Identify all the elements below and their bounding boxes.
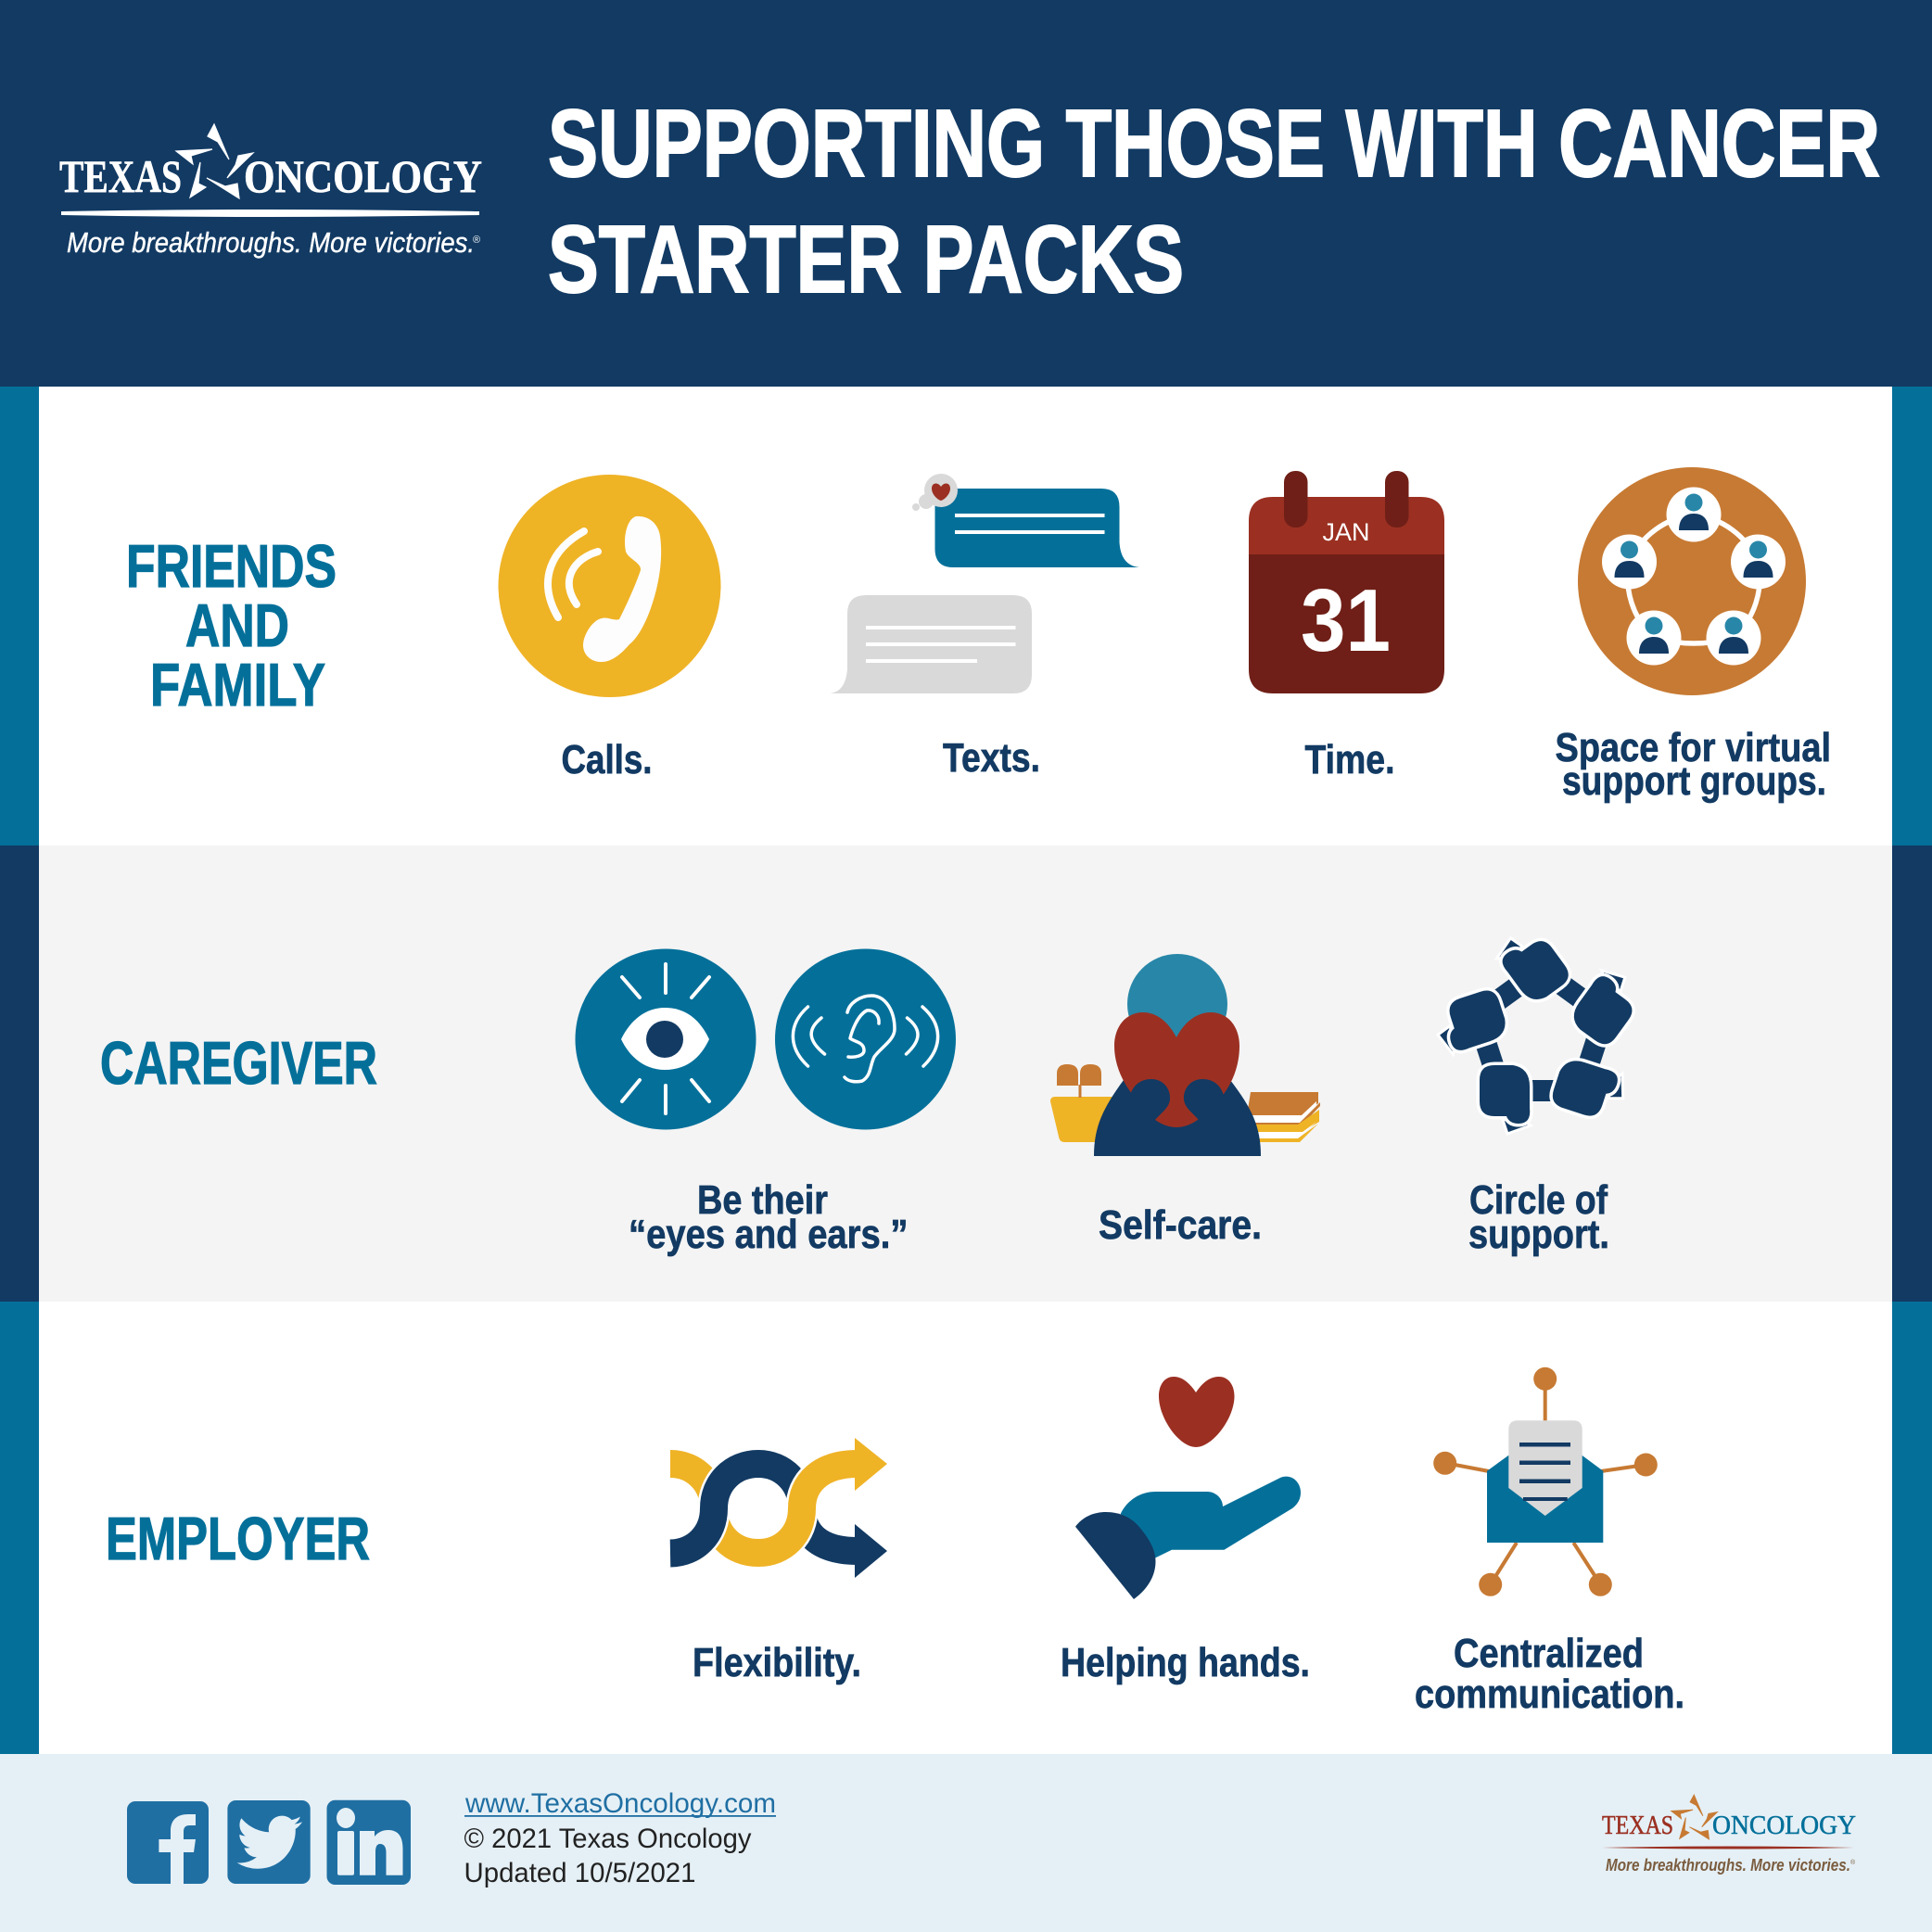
icon: flexibility crossing arrows bbox=[670, 1438, 887, 1578]
panel: caregiver bbox=[0, 845, 1932, 1302]
icon: calendar: 31 bbox=[1301, 571, 1391, 670]
icon: ear bbox=[775, 949, 956, 1129]
logo: Texas Oncology colour: More breakthroughs. More victories. bbox=[1606, 1856, 1850, 1875]
copyright text: Updated 10/5/2021 bbox=[464, 1858, 695, 1888]
icon: eye bbox=[575, 949, 756, 1129]
panel: employer bbox=[0, 1302, 1932, 1754]
icon: linkedin bbox=[326, 1800, 411, 1885]
panel: friends and family bbox=[0, 387, 1932, 845]
icon: facebook bbox=[127, 1801, 209, 1884]
logo: Texas Oncology white: More breakthroughs. More victories. bbox=[67, 226, 475, 259]
label: space for virtual support groups: Space for virtual bbox=[1556, 725, 1831, 770]
label: circle of support: support. bbox=[1468, 1212, 1609, 1257]
icon: calendar: JAN bbox=[1322, 518, 1370, 546]
icon: phone calls bbox=[499, 475, 721, 697]
logo: Texas Oncology colour: TEXAS bbox=[1602, 1811, 1673, 1840]
icon: circle of support fists bbox=[1436, 930, 1642, 1134]
icon: self-care bbox=[1050, 954, 1320, 1156]
label: be their eyes and ears: Be their bbox=[697, 1177, 828, 1223]
heading: employer: EMPLOYER bbox=[106, 1505, 370, 1572]
label: flexibility: Flexibility. bbox=[693, 1640, 861, 1685]
heading: friends and family: FAMILY bbox=[150, 651, 325, 718]
label: centralized communication bbox=[1415, 1631, 1684, 1717]
label: space for virtual support groups: support groups. bbox=[1562, 758, 1826, 804]
title bbox=[548, 90, 1880, 312]
label: calls: Calls. bbox=[562, 737, 653, 782]
icon: text message bubbles bbox=[831, 474, 1139, 693]
label: space for virtual support groups bbox=[1556, 725, 1831, 804]
logo: Texas Oncology white: TEXAS bbox=[59, 150, 182, 202]
label: circle of support: Circle of bbox=[1469, 1177, 1608, 1223]
title: STARTER PACKS bbox=[548, 206, 1184, 312]
label: centralized communication: Centralized bbox=[1454, 1631, 1644, 1676]
label: be their eyes and ears bbox=[629, 1177, 909, 1257]
label: texts: Texts. bbox=[943, 735, 1040, 781]
heading: caregiver: CAREGIVER bbox=[100, 1029, 377, 1097]
heading: friends and family: AND bbox=[185, 591, 289, 659]
label: time: Time. bbox=[1305, 737, 1394, 782]
footer band bbox=[0, 1754, 1932, 1932]
icon: calendar bbox=[1249, 471, 1444, 693]
logo: Texas Oncology white bbox=[59, 124, 482, 259]
icon: helping hand with heart bbox=[1075, 1377, 1301, 1599]
logo: Texas Oncology colour: ® bbox=[1850, 1859, 1856, 1866]
label: helping hands: Helping hands. bbox=[1061, 1640, 1310, 1685]
website link: www.TexasOncology.com bbox=[464, 1788, 776, 1819]
icon: virtual support group circle bbox=[1578, 467, 1806, 695]
label: centralized communication: communication. bbox=[1415, 1671, 1684, 1717]
label: self-care: Self-care. bbox=[1099, 1202, 1262, 1248]
logo: Texas Oncology colour: ONCOLOGY bbox=[1712, 1811, 1856, 1840]
heading: friends and family bbox=[126, 532, 337, 718]
logo: Texas Oncology white: ONCOLOGY bbox=[244, 150, 482, 202]
icon: centralized communication envelope bbox=[1433, 1367, 1658, 1596]
copyright text bbox=[464, 1824, 751, 1888]
copyright text: © 2021 Texas Oncology bbox=[464, 1824, 751, 1854]
logo: Texas Oncology white: ® bbox=[473, 235, 480, 246]
label: be their eyes and ears: “eyes and ears.” bbox=[629, 1212, 909, 1257]
label: circle of support bbox=[1468, 1177, 1609, 1257]
logo: Texas Oncology colour bbox=[1602, 1795, 1856, 1875]
icon: twitter bbox=[227, 1800, 311, 1884]
header band bbox=[0, 0, 1932, 387]
heading: friends and family: FRIENDS bbox=[126, 532, 337, 600]
